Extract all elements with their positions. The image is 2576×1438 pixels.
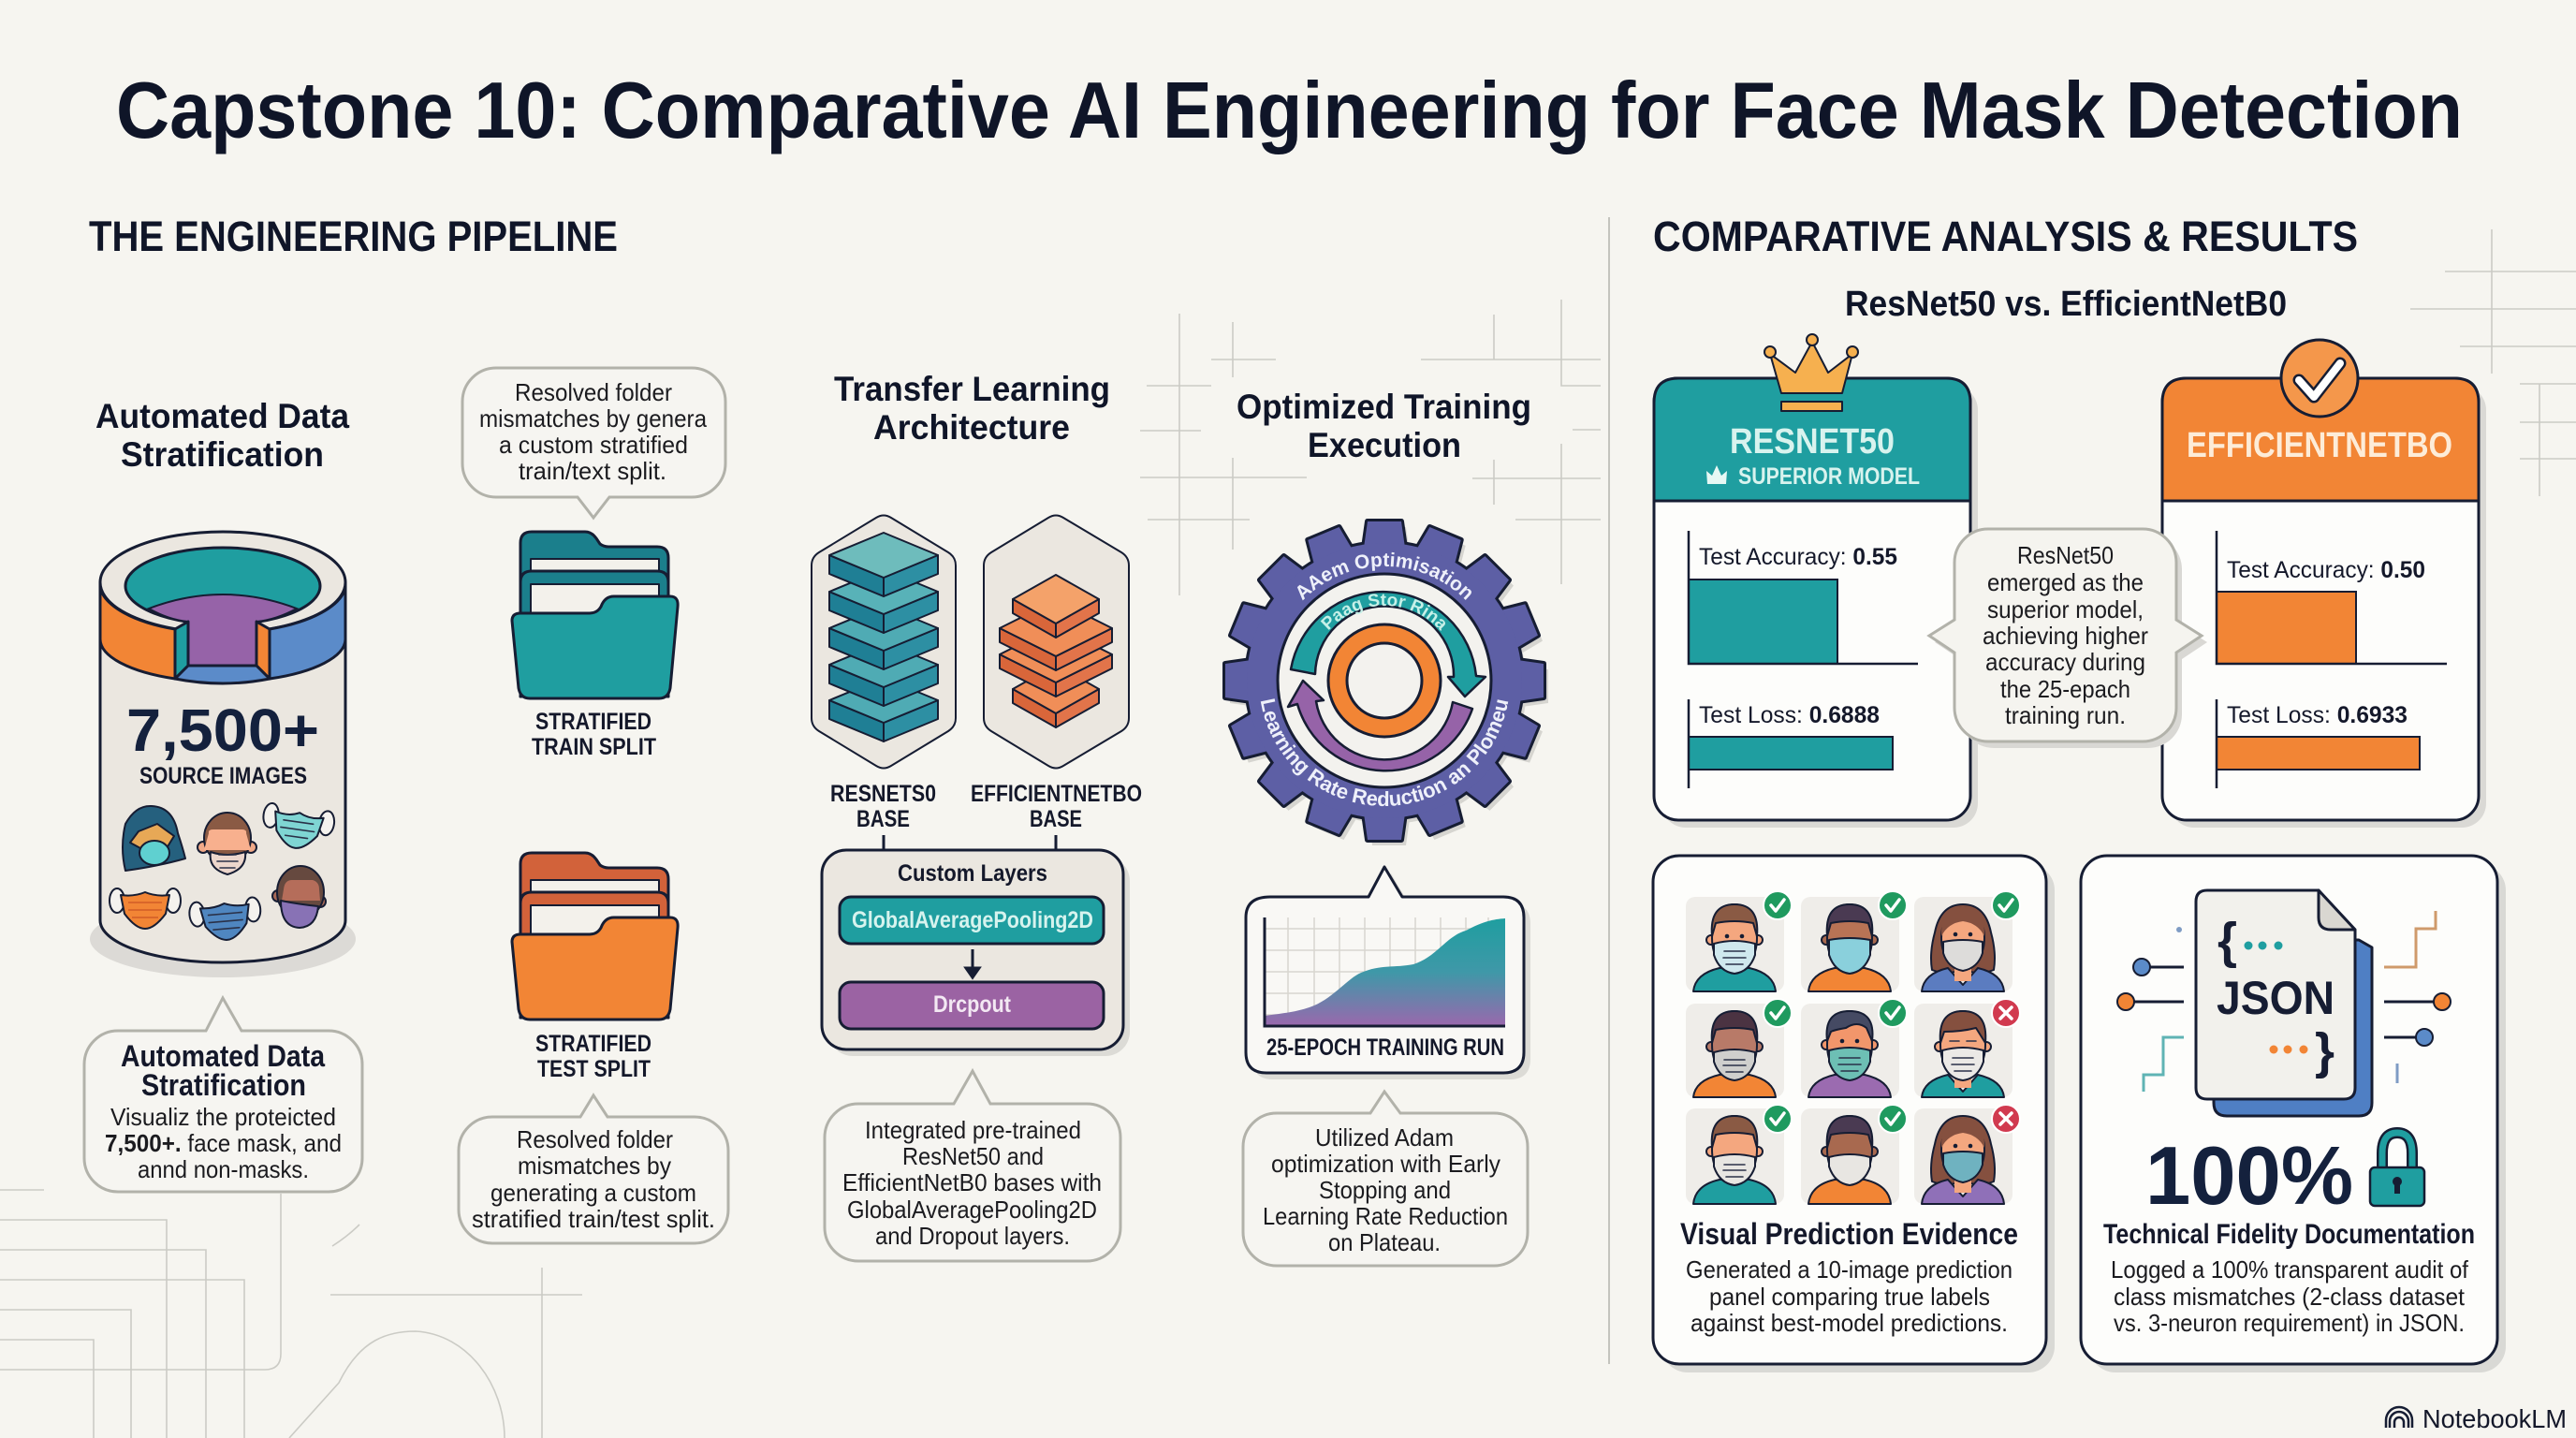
chart: test accuracy: Test Accuracy: 0.50 [2227, 557, 2425, 583]
arrow: teal cycle [1291, 592, 1486, 697]
callout: folder mismatches (bottom): Resolved folder [517, 1125, 673, 1153]
section heading: results: COMPARATIVE ANALYSIS & RESULTS [1653, 213, 2358, 260]
label: stratified test split [535, 1031, 651, 1082]
text: technical fidelity description: vs. 3-neuron requirement) in JSON. [2114, 1309, 2465, 1337]
badge: correct [1992, 891, 2020, 919]
callout: optimized training: Learning Rate Reduction [1263, 1202, 1508, 1230]
callout: transfer learning: ResNet50 and [902, 1142, 1044, 1170]
chart: test accuracy [1689, 531, 1918, 664]
badge: incorrect [1992, 1105, 2020, 1133]
heading: technical fidelity documentation: Technical Fidelity Documentation [2103, 1219, 2475, 1250]
label: stratified test split: TEST SPLIT [537, 1056, 651, 1082]
prediction face 7 [1686, 1108, 1784, 1204]
label: source images: SOURCE IMAGES [139, 763, 307, 789]
area chart [1265, 918, 1505, 1026]
callout: optimized training: optimization with Early [1271, 1150, 1500, 1178]
callout: optimized training [1243, 1092, 1528, 1266]
badge: incorrect [1992, 999, 2020, 1027]
layer: dropout: Drcpout [933, 991, 1012, 1018]
callout: folder mismatches (top): Resolved folder [515, 378, 672, 406]
subheading: model comparison: ResNet50 vs. EfficientNetB0 [1845, 285, 2287, 324]
text: visual prediction description: against best-model predictions. [1690, 1309, 2008, 1337]
callout: automated data stratification: 7,500+. face mask, and [105, 1129, 342, 1157]
label: stratified train split [532, 709, 656, 760]
callout: transfer learning: EfficientNetB0 bases with [842, 1168, 1102, 1196]
stat: 100%: 100% [2145, 1129, 2353, 1222]
chart card: 25-epoch training run: 25-EPOCH TRAINING RUN [1266, 1034, 1504, 1061]
badge: correct [1879, 999, 1907, 1027]
icon: check badge [2281, 340, 2358, 417]
heading: automated data stratification [95, 397, 349, 474]
icon: orange folder [512, 853, 678, 1020]
panel: custom layers [822, 850, 1130, 1056]
icon: json document: } [2315, 1023, 2334, 1079]
heading: transfer learning architecture [834, 370, 1110, 447]
callout: folder mismatches (bottom): generating a custom [490, 1179, 696, 1207]
badge: correct [1764, 999, 1792, 1027]
label: stratified train split: TRAIN SPLIT [532, 734, 656, 760]
text: visual prediction description: Generated a 10-image prediction [1686, 1255, 2012, 1284]
prediction face 9 [1914, 1108, 2012, 1204]
icon: efficientnetb0 layer stack [984, 515, 1129, 768]
callout: transfer learning [825, 1071, 1120, 1261]
label: learning rate reduction: Learning Rate Reduction an Plomeu [1260, 698, 1509, 807]
callout: folder mismatches (top): a custom stratified [499, 431, 688, 459]
badge: correct [1764, 1105, 1792, 1133]
icon: teal folder [512, 532, 678, 698]
icon: resnet50 layer stack [812, 515, 956, 768]
prediction face 2 [1801, 897, 1899, 991]
callout: automated data stratification [84, 998, 362, 1192]
label: patience stop: Paag Stor Rina [1320, 594, 1445, 631]
chart: test accuracy [2217, 531, 2447, 664]
callout: comparison verdict: emerged as the [1987, 568, 2144, 596]
layer: global average pooling [840, 897, 1104, 944]
callout: transfer learning: GlobalAveragePooling2D [847, 1196, 1097, 1224]
watermark: notebooklm: NotebookLM [2422, 1404, 2567, 1433]
section heading: pipeline: THE ENGINEERING PIPELINE [89, 213, 618, 260]
icon: json document [2196, 890, 2372, 1116]
callout: comparison verdict: achieving higher [1983, 622, 2148, 650]
heading: transfer learning architecture: Transfer Learning [834, 370, 1110, 408]
callout: comparison verdict: the 25-epach [2000, 675, 2130, 703]
heading: automated data stratification: Stratification [121, 435, 324, 474]
callout: folder mismatches (bottom): stratified train/test split. [472, 1205, 715, 1233]
callout: folder mismatches (top) [462, 368, 725, 518]
icon: face with purple mask [272, 866, 326, 928]
icon: orange mask [110, 888, 181, 929]
icon: teal mask [259, 802, 336, 853]
text: visual prediction description [1686, 1255, 2012, 1337]
label: adam optimisation: AAem Optimisation [1297, 552, 1471, 601]
heading: automated data stratification: Automated Data [95, 397, 349, 435]
label: resnet50: RESNET50 [1730, 422, 1895, 462]
callout: comparison verdict: ResNet50 [2017, 541, 2114, 569]
callout: comparison verdict: training run. [2005, 701, 2126, 729]
layer: dropout [840, 982, 1104, 1029]
icon: face with pale mask [198, 813, 256, 874]
panel: technical fidelity documentation [2081, 856, 2506, 1372]
chart: test loss: Test Loss: 0.6933 [2227, 702, 2408, 728]
heading: optimized training execution: Execution [1308, 426, 1461, 464]
chart: test loss [2217, 699, 2420, 788]
text: technical fidelity description [2111, 1255, 2469, 1337]
prediction face 4 [1686, 1004, 1784, 1097]
icon: crown [1764, 334, 1858, 411]
heading: visual prediction evidence: Visual Prediction Evidence [1680, 1217, 2018, 1251]
callout: comparison verdict: accuracy during [1985, 648, 2145, 676]
badge: correct [1764, 891, 1792, 919]
heading: transfer learning architecture: Architecture [873, 408, 1070, 447]
heading: optimized training execution: Optimized Training [1237, 388, 1531, 426]
callout: optimized training: Utilized Adam [1315, 1123, 1454, 1152]
prediction face 8 [1801, 1108, 1899, 1204]
arrow: pooling to dropout [966, 949, 979, 977]
callout: optimized training: Stopping and [1319, 1176, 1451, 1204]
callout: automated data stratification: Visualiz the proteicted [110, 1103, 336, 1131]
callout: automated data stratification: annd non-masks. [138, 1155, 309, 1183]
callout: folder mismatches (bottom) [459, 1095, 728, 1243]
prediction face 3 [1914, 897, 2012, 991]
icon: json document: JSON [2217, 972, 2334, 1024]
callout: transfer learning: Integrated pre-trained [865, 1116, 1081, 1144]
panel: visual prediction evidence [1653, 856, 2055, 1372]
badge: correct [1879, 1105, 1907, 1133]
icon: training gear [1222, 519, 1548, 845]
label: efficientnetb0 base: BASE [1030, 806, 1082, 832]
callout: optimized training: on Plateau. [1328, 1228, 1441, 1256]
stat: 7,500+: 7,500+ [126, 697, 319, 764]
layer: global average pooling: GlobalAveragePooling2D [852, 907, 1093, 933]
prediction face 5 [1801, 1004, 1899, 1097]
label: stratified test split: STRATIFIED [535, 1031, 651, 1057]
text: visual prediction description: panel comparing true labels [1709, 1283, 1990, 1311]
label: efficientnetb0: EFFICIENTNETBO [2187, 426, 2452, 465]
callout: folder mismatches (top): mismatches by genera [479, 404, 708, 433]
icon: data cylinder [90, 532, 356, 977]
panel: resnet50 card [1654, 334, 1978, 828]
callout: automated data stratification: Automated Data [121, 1039, 325, 1073]
callout: folder mismatches (bottom): mismatches by [518, 1152, 671, 1180]
label: resnet50 base [830, 781, 936, 832]
callout: comparison verdict [1929, 529, 2207, 748]
label: efficientnetb0 base: EFFICIENTNETBO [971, 781, 1142, 807]
text: technical fidelity description: class mismatches (2-class dataset [2114, 1283, 2466, 1311]
icon: json document: { [2217, 913, 2237, 969]
icon: circuit traces [2117, 911, 2451, 1092]
chart: test loss: Test Loss: 0.6888 [1699, 702, 1880, 728]
label: stratified train split: STRATIFIED [535, 709, 651, 735]
callout: transfer learning: and Dropout layers. [875, 1222, 1070, 1250]
callout: comparison verdict: superior model, [1987, 595, 2144, 624]
chart card: 25-epoch training run [1246, 867, 1530, 1079]
heading: optimized training execution [1237, 388, 1531, 464]
text: technical fidelity description: Logged a 100% transparent audit of [2111, 1255, 2469, 1284]
badge: correct [1879, 891, 1907, 919]
panel: custom layers: Custom Layers [898, 860, 1047, 887]
arrow: purple cycle [1288, 681, 1472, 770]
panel: efficientnetb0 card [2162, 340, 2486, 828]
label: resnet50 base: RESNETS0 [830, 781, 936, 807]
prediction face 1 [1686, 897, 1784, 991]
callout: automated data stratification: Stratification [141, 1068, 306, 1102]
callout: folder mismatches (top): train/text split. [519, 457, 666, 485]
chart: test accuracy: Test Accuracy: 0.55 [1699, 544, 1897, 570]
icon: blue mask [188, 897, 263, 943]
icon: padlock [2370, 1133, 2424, 1206]
label: efficientnetb0 base [971, 781, 1142, 832]
chart: test loss [1689, 699, 1893, 788]
prediction face 6 [1914, 1004, 2012, 1097]
icon: hooded face with mask [123, 806, 185, 871]
title: Capstone 10: Comparative AI Engineering for Face Mask Detection [116, 66, 2463, 155]
label: resnet50 base: BASE [856, 806, 910, 832]
label: superior model: SUPERIOR MODEL [1738, 463, 1920, 490]
